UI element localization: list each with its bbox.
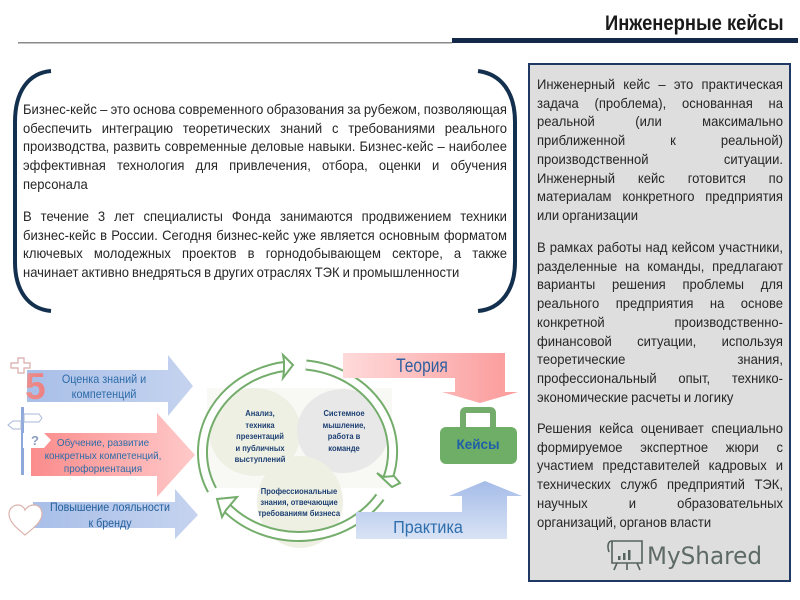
- text: business case intro: производства, развить современные деловые навыки. Бизнес-кейс – наиболее: [23, 138, 507, 154]
- cycle arrows: [202, 355, 400, 536]
- text: case evaluation: Решения кейса оценивает специально: [537, 420, 783, 436]
- right bracket: [478, 71, 515, 311]
- text: case evaluation: формируемое экспертное жюри с: [537, 439, 783, 455]
- label: systems thinking: Системное: [323, 409, 365, 418]
- text: business case intro: эффективная технология для привлечения, отбора, оценки и обучения: [23, 157, 507, 173]
- watermark: MyShared: [647, 542, 762, 570]
- label: professional knowledge: Профессиональные: [261, 487, 338, 496]
- label: professional knowledge: знания, отвечающие: [260, 498, 338, 507]
- label: professional knowledge: требованиям бизнеса: [258, 509, 340, 518]
- label: systems thinking: мышление,: [323, 421, 365, 430]
- text: engineering case definition: или организации: [537, 207, 638, 223]
- title: Инженерные кейсы: [605, 12, 784, 35]
- text: case evaluation: организаций, органов власти: [537, 514, 711, 530]
- text: engineering case definition: приближенной к реальной): [537, 132, 783, 148]
- text: case evaluation: участием представителей кадровых и: [537, 457, 783, 473]
- label: analysis: техника: [245, 421, 275, 430]
- text: team work: конкретной производственно-: [537, 314, 783, 330]
- text: business case intro: персонала: [23, 176, 88, 192]
- text: team work: теоретические знания,: [537, 351, 783, 367]
- icon: case briefcase: [440, 410, 517, 464]
- arrow: loyalty: [33, 489, 198, 539]
- cycle blob: professional knowledge: [257, 456, 343, 548]
- left bracket: [15, 71, 51, 311]
- text: team work: профессиональный опыт, технико-: [537, 370, 783, 386]
- arrow: training: конкретных компетенций,: [45, 451, 161, 462]
- label: systems thinking: работа в: [328, 432, 360, 441]
- text: foundation work: бизнес-кейс в России. Сегодня бизнес-кейс уже является основным форматом: [23, 227, 507, 243]
- arrow: training: профориентация: [64, 463, 142, 475]
- arrow: knowledge assessment: компетенций: [72, 389, 136, 401]
- text: engineering case definition: Инженерный кейс готовится по: [537, 170, 783, 186]
- text: team work: экономические расчеты и логику: [537, 389, 733, 405]
- arrow: practice: [356, 481, 522, 539]
- text: team work: финансовой ситуации, используя: [537, 333, 783, 349]
- text: business case intro: [23, 101, 507, 192]
- text: engineering case definition: Инженерный кейс – это практическая: [537, 76, 783, 92]
- text: case evaluation: научных и образовательных: [537, 495, 783, 511]
- label: systems thinking: команде: [328, 444, 360, 453]
- icon: heart: [9, 505, 42, 535]
- text: foundation work: [23, 208, 507, 280]
- arrow: knowledge assessment: Оценка знаний и: [62, 374, 146, 386]
- cycle blob: systems thinking: [297, 389, 389, 473]
- text: team work: В рамках работы над кейсом участники,: [537, 239, 783, 255]
- text: foundation work: ключевых молодежных проектов в горнодобывающем секторе, а также: [23, 245, 507, 261]
- text: team work: реального предприятия на основе: [537, 295, 783, 311]
- text: team work: разделенные на команды, предлагают: [537, 258, 783, 274]
- arrow: loyalty: Повышение лояльности: [50, 501, 170, 514]
- text: case evaluation: [537, 420, 783, 530]
- icon: signpost: ?: [31, 433, 39, 448]
- icon: case briefcase: Кейсы: [456, 437, 500, 452]
- right panel box: [529, 64, 790, 581]
- arrow: knowledge assessment: [27, 355, 193, 416]
- icon: five: 5: [25, 366, 46, 407]
- arrow: theory: [343, 353, 518, 403]
- arrow: training: [31, 413, 195, 497]
- label: analysis: презентаций: [236, 432, 284, 441]
- label: analysis: выступлений: [235, 455, 285, 464]
- text: team work: [537, 239, 783, 405]
- icon: plus: [11, 358, 30, 373]
- arrow: loyalty: к бренду: [88, 517, 132, 530]
- arrow: theory: Теория: [396, 355, 448, 376]
- text: team work: варианты решения проблемы для: [537, 276, 783, 292]
- title rule: [18, 38, 798, 44]
- arrow: training: Обучение, развитие: [57, 437, 149, 449]
- label: analysis: Анализ,: [245, 409, 275, 418]
- text: foundation work: В течение 3 лет специалисты Фонда занимаются продвижением техники: [23, 208, 507, 224]
- text: engineering case definition: задача (проблема), основанная на: [537, 95, 783, 111]
- text: engineering case definition: производственной ситуации.: [537, 151, 783, 167]
- text: engineering case definition: реальной (или максимально: [537, 113, 783, 129]
- text: business case intro: обеспечить интеграцию теоретических знаний с требованиями реального: [23, 120, 507, 136]
- text: case evaluation: технических служб предприятий ТЭК,: [537, 476, 783, 492]
- diagram background: [207, 388, 392, 488]
- cycle blob: analysis: [209, 388, 301, 476]
- label: analysis: и публичных: [235, 444, 285, 453]
- text: foundation work: начинает активно внедряться в других отраслях ТЭК и промышленности: [23, 264, 459, 280]
- text: business case intro: Бизнес-кейс – это основа современного образования за рубежом, позволяющая: [23, 101, 507, 117]
- icon: signpost: [8, 407, 51, 475]
- arrow: practice: Практика: [393, 517, 463, 537]
- text: engineering case definition: материалам конкретного предприятия: [537, 188, 783, 204]
- text: engineering case definition: [537, 76, 783, 223]
